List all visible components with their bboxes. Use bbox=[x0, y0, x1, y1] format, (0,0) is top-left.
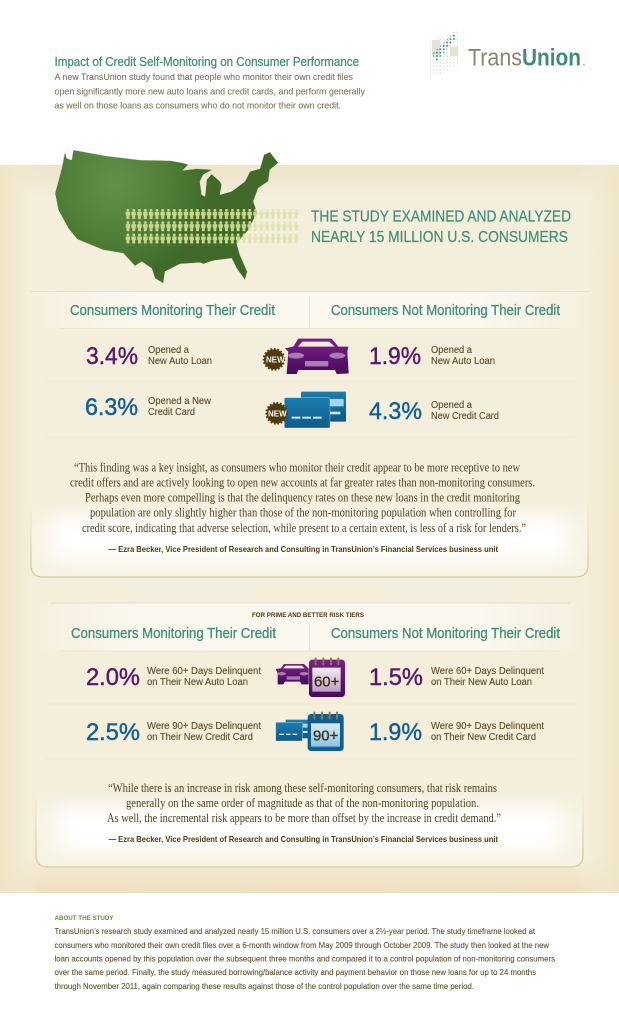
icon: cards with 90+ calendar: 90+ bbox=[313, 728, 338, 744]
stat: 1.9% auto loan: New Auto Loan bbox=[431, 356, 495, 367]
quote box bbox=[31, 500, 588, 577]
stat: 1.5% 60+ days bbox=[369, 664, 544, 691]
stat: 1.9% auto loan: Opened a bbox=[431, 345, 472, 356]
about heading: ABOUT THE STUDY bbox=[54, 915, 114, 922]
stat: 1.5% 60+ days: on Their New Auto Loan bbox=[431, 677, 532, 688]
stat: 1.9% 90+ days bbox=[369, 719, 544, 746]
quote text: credit score, indicating that adverse selection, while present to a certain extent, is less of a risk for lenders.” bbox=[82, 521, 526, 535]
study headline: NEARLY 15 MILLION U.S. CONSUMERS bbox=[311, 229, 568, 246]
stat: 2.0% 60+ days bbox=[86, 664, 261, 691]
quote text: generally on the same order of magnitude as that of the non-monitoring population. bbox=[126, 796, 479, 810]
stat: 2.5% 90+ days: 2.5% bbox=[86, 719, 140, 746]
map of the United States with people grid bbox=[55, 150, 299, 283]
logo wordmark bbox=[468, 44, 586, 72]
stat: 1.9% auto loan bbox=[369, 343, 495, 370]
column heading: not monitoring: Consumers Not Monitoring Their Credit bbox=[331, 625, 561, 642]
logo wordmark: Union bbox=[522, 44, 581, 72]
stat: 4.3% credit card: 4.3% bbox=[369, 398, 422, 425]
stat: 6.3% credit card: Credit Card bbox=[148, 407, 195, 418]
stat: 4.3% credit card: Opened a bbox=[431, 400, 472, 411]
about paragraph: over the same period. Finally, the study measured borrowing/balance activity and payment behavior on those new loans for up to 24 months bbox=[54, 968, 536, 977]
column heading: not monitoring: Consumers Not Monitoring Their Credit bbox=[331, 302, 561, 319]
quote text: Perhaps even more compelling is that the delinquency rates on these new loans in the credit monitoring bbox=[85, 490, 521, 504]
study headline bbox=[311, 208, 571, 246]
people grid bbox=[125, 209, 299, 246]
intro paragraph: A new TransUnion study found that people who monitor their own credit files bbox=[54, 71, 353, 82]
about paragraph: loan accounts opened by this population over the subsequent three months and compared it to a control population of non-monitoring consumers bbox=[54, 954, 555, 964]
panel: delinquency rates bbox=[30, 603, 590, 759]
stat: 1.9% 90+ days: Were 90+ Days Delinquent bbox=[431, 721, 544, 732]
intro paragraph: as well on those loans as consumers who do not monitor their own credit. bbox=[54, 100, 341, 110]
quote text: “This finding was a key insight, as consumers who monitor their credit appear to be more receptive to new bbox=[74, 460, 520, 474]
stat: 2.0% 60+ days: on Their New Auto Loan bbox=[147, 677, 248, 688]
stat: 2.5% 90+ days bbox=[86, 719, 261, 746]
icon: new car bbox=[264, 339, 349, 374]
stat: 1.9% 90+ days: 1.9% bbox=[369, 719, 422, 746]
badge: new: NEW bbox=[268, 408, 287, 418]
badge: new: NEW bbox=[266, 354, 285, 364]
about the study bbox=[54, 915, 555, 991]
attribution: — Ezra Becker, Vice President of Research and Consulting in TransUnion’s Financial Services business unit bbox=[108, 544, 498, 554]
quote text: population are only slightly higher than those of the non-monitoring population when controlling for bbox=[90, 506, 517, 520]
stat: 6.3% credit card bbox=[85, 394, 212, 421]
about paragraph: consumers who monitored their own credit files over a 6-month window from May 2009 through October 2009. The study then looked at the new bbox=[54, 941, 549, 950]
quote text: “While there is an increase in risk among these self-monitoring consumers, that risk remains bbox=[108, 781, 497, 795]
stat: 6.3% credit card: 6.3% bbox=[85, 394, 138, 421]
logo wordmark: . bbox=[582, 56, 586, 68]
intro paragraph bbox=[54, 71, 365, 110]
stat: 4.3% credit card bbox=[369, 398, 499, 425]
header band bbox=[30, 292, 590, 328]
stat: 1.5% 60+ days: 1.5% bbox=[369, 664, 423, 691]
quote text: credit offers and are actively looking to open new accounts at far greater rates than non-monitoring consumers. bbox=[70, 476, 535, 490]
map shape bbox=[55, 150, 278, 283]
intro paragraph: open significantly more new auto loans and credit cards, and perform generally bbox=[54, 86, 365, 96]
stat: 2.0% 60+ days: Were 60+ Days Delinquent bbox=[147, 666, 261, 677]
column heading: monitoring: Consumers Monitoring Their Credit bbox=[70, 302, 276, 319]
stat: 2.5% 90+ days: on Their New Credit Card bbox=[147, 732, 253, 743]
quote text bbox=[70, 460, 535, 535]
attribution: — Ezra Becker, Vice President of Research and Consulting in TransUnion’s Financial Services business unit bbox=[108, 834, 498, 844]
logo: TransUnion bbox=[430, 30, 586, 78]
stat: 1.9% 90+ days: on Their New Credit Card bbox=[431, 732, 536, 743]
icon: car with 60+ calendar: 60+ bbox=[314, 674, 339, 690]
icon: cards with 90+ calendar bbox=[276, 713, 344, 751]
column heading: monitoring: Consumers Monitoring Their Credit bbox=[71, 625, 277, 642]
stat: 2.5% 90+ days: Were 90+ Days Delinquent bbox=[147, 721, 261, 732]
heading: Impact of Credit Self-Monitoring on Consumer Performance bbox=[54, 55, 359, 69]
quote text bbox=[107, 781, 501, 825]
stat: 3.4% auto loan: New Auto Loan bbox=[148, 356, 212, 367]
about paragraph: TransUnion’s research study examined and analyzed nearly 15 million U.S. consumers over a 2½-year period. The study timeframe looked at bbox=[54, 927, 536, 936]
about paragraph bbox=[54, 927, 555, 991]
callout: first quote bbox=[31, 460, 588, 577]
stat: 3.4% auto loan: Opened a bbox=[148, 345, 189, 356]
beige background panel bbox=[0, 165, 619, 893]
stat: 3.4% auto loan bbox=[86, 343, 212, 370]
logo dot mark bbox=[430, 30, 458, 78]
header band bbox=[30, 603, 590, 651]
header text block bbox=[54, 55, 365, 110]
quote box bbox=[36, 790, 583, 867]
about paragraph: through November 2011, again comparing these results against those of the control population over the same time period. bbox=[54, 982, 474, 991]
study headline: THE STUDY EXAMINED AND ANALYZED bbox=[311, 208, 571, 226]
callout: second quote bbox=[36, 781, 583, 867]
subheading: FOR PRIME AND BETTER RISK TIERS bbox=[252, 612, 365, 619]
stat: 4.3% credit card: New Credit Card bbox=[431, 411, 499, 422]
panel: new account openings bbox=[30, 292, 590, 437]
stat: 6.3% credit card: Opened a New bbox=[148, 396, 212, 407]
stat: 2.0% 60+ days: 2.0% bbox=[86, 664, 140, 691]
icon: new credit cards bbox=[267, 392, 346, 428]
stat: 1.9% auto loan: 1.9% bbox=[369, 343, 421, 370]
stat: 3.4% auto loan: 3.4% bbox=[86, 343, 138, 370]
logo wordmark: Trans bbox=[468, 44, 522, 72]
stat: 1.5% 60+ days: Were 60+ Days Delinquent bbox=[431, 666, 544, 677]
icon: car with 60+ calendar bbox=[276, 658, 345, 697]
quote text: As well, the incremental risk appears to be more than offset by the increase in credit demand.” bbox=[107, 811, 501, 825]
